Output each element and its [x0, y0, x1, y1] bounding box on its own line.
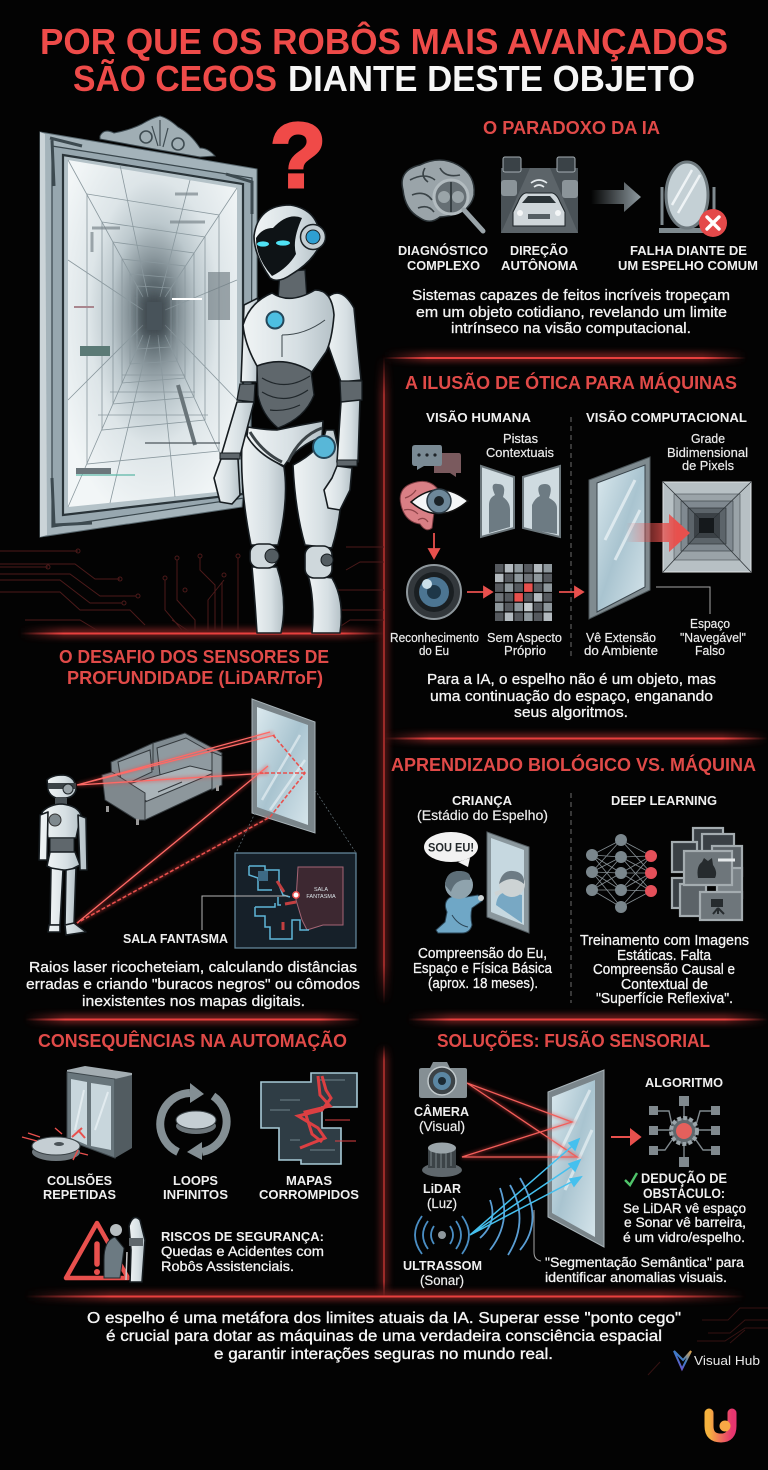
label ultrasound: ULTRASSOM: [403, 1258, 482, 1273]
callout line: [202, 896, 288, 930]
phantom room: [296, 867, 343, 930]
callout line: [656, 587, 710, 614]
blue beams: [470, 1139, 581, 1235]
labels: DIREÇÃO: [510, 243, 568, 258]
icon: tall mirror: [589, 457, 650, 619]
title: POR QUE OS ROBÔS MAIS AVANÇADOS: [40, 20, 728, 62]
text: semantic segmentation: [545, 1254, 744, 1285]
mirror crest: [100, 116, 215, 157]
text: obstacle deduction: [623, 1169, 746, 1245]
labels: pistas and grade: Grade: [691, 432, 725, 446]
heading: SOLUÇÕES: FUSÃO SENSORIAL: [437, 1030, 710, 1051]
text: obstacle deduction: Se LiDAR vê espaço: [623, 1200, 746, 1216]
robot pelvis: [247, 421, 323, 466]
phantom room label: [306, 887, 336, 900]
title: [40, 20, 728, 99]
body text: intrínseco na visão computacional.: [451, 320, 691, 337]
icon: oval mirror with X: [659, 162, 727, 237]
icon: lidar: [422, 1142, 462, 1177]
logo: Visual Hub: [674, 1351, 760, 1369]
body text machine: Contextual de: [621, 976, 708, 993]
labels: bottom row: Vê Extensão: [586, 631, 656, 645]
panel: aprendizado biológico vs máquina: [391, 754, 756, 1007]
labels: bottom row: Espaço: [690, 617, 730, 631]
column headings: CRIANÇA: [452, 793, 513, 808]
title: DIANTE DESTE OBJETO: [288, 58, 695, 99]
labels: COMPLEXO: [407, 258, 480, 273]
conclusion text: O espelho é uma metáfora dos limites atuais da IA. Superar esse "ponto cego": [87, 1310, 681, 1327]
arrow: [559, 587, 583, 597]
body text: seus algoritmos.: [514, 704, 628, 721]
body text child: [413, 945, 553, 992]
panel: o paradoxo da IA: [398, 117, 758, 337]
heading: O PARADOXO DA IA: [483, 117, 660, 138]
robot abdomen: [257, 360, 314, 428]
icon: mirror: [548, 1070, 604, 1247]
label: SALA FANTASMA: [123, 931, 229, 946]
body text: erradas e criando "buracos negros" ou cômodos: [26, 976, 360, 993]
circuit traces bottom right: [648, 1308, 768, 1375]
body text child: Compreensão do Eu,: [418, 945, 547, 962]
icon: pixel tunnel: [663, 482, 751, 572]
labels: bottom row: Falso: [695, 644, 725, 658]
labels: COLISÕES: [47, 1173, 112, 1188]
body text machine: Treinamento com Imagens: [580, 932, 749, 949]
icon: humanoid robot: [214, 205, 362, 633]
labels: bottom row: Reconhecimento: [390, 631, 479, 645]
body text child: (aprox. 18 meses).: [428, 975, 538, 992]
labels: pistas and grade: de Pixels: [682, 459, 734, 473]
panel: hero illustration: [0, 105, 384, 633]
body text: [427, 671, 716, 721]
labels: [43, 1173, 359, 1202]
label lidar: [423, 1181, 462, 1211]
icon: baby: [436, 871, 484, 933]
icon: wardrobe and robot vacuum: [22, 1066, 132, 1161]
labels: bottom row: [390, 617, 746, 658]
labels: CORROMPIDOS: [259, 1187, 359, 1202]
icon: robot small: [39, 775, 87, 935]
icon: algorithm gear: [649, 1096, 720, 1167]
icon: speech bubbles: [412, 445, 461, 477]
icon: two mirrors with silhouettes: [481, 466, 560, 537]
text: obstacle deduction: DEDUÇÃO DE: [641, 1169, 727, 1186]
callout line: [534, 1210, 541, 1261]
icon: brain and eye: [400, 481, 468, 530]
labels: REPETIDAS: [43, 1187, 116, 1202]
column headings: (Estádio do Espelho): [417, 807, 548, 823]
robot head: [254, 205, 320, 280]
labels: bottom row: do Ambiente: [584, 644, 658, 658]
icon: check mark: [625, 1173, 637, 1185]
lasers: [77, 732, 305, 923]
heading: O DESAFIO DOS SENSORES DE: [59, 646, 329, 667]
robot legs: [242, 430, 286, 545]
column headings: DEEP LEARNING: [611, 793, 717, 808]
mirror glass tunnel: [68, 160, 237, 507]
robot chest: [243, 290, 334, 372]
text: safety risks: Robôs Assistenciais.: [161, 1258, 294, 1274]
labels: pistas and grade: Contextuais: [486, 446, 554, 460]
section dividers: [20, 352, 768, 1301]
icon: sonar arcs: [480, 1178, 532, 1255]
arrow: [591, 182, 641, 212]
label camera: CÂMERA: [414, 1104, 470, 1119]
robot arms: [325, 293, 361, 382]
body text: [412, 287, 730, 337]
label algorithm: ALGORITMO: [645, 1075, 723, 1090]
labels: bottom row: "Navegável": [680, 631, 746, 645]
pixel grid: [495, 564, 552, 621]
robot neck: [278, 270, 307, 300]
heading: CONSEQUÊNCIAS NA AUTOMAÇÃO: [38, 1030, 347, 1051]
arrow: red gradient: [626, 514, 690, 552]
text: obstacle deduction: é um vidro/espelho.: [623, 1229, 745, 1245]
logo: bottom U mark: [709, 1413, 732, 1438]
labels: MAPAS: [286, 1173, 332, 1188]
icon: question mark: ?: [270, 105, 326, 207]
speech bubble: [424, 832, 478, 867]
body text: Raios laser ricocheteiam, calculando distâncias: [29, 959, 357, 976]
label ultrasound: [403, 1258, 482, 1288]
labels: DIAGNÓSTICO: [398, 243, 488, 258]
icon: ornate mirror: [40, 116, 257, 537]
labels: bottom row: Sem Aspecto: [487, 631, 562, 645]
heading: APRENDIZADO BIOLÓGICO VS. MÁQUINA: [391, 754, 756, 775]
speech bubble: SOU EU!: [428, 842, 474, 854]
label lidar: (Luz): [427, 1196, 457, 1211]
body text: em um objeto cotidiano, revelando um limite: [416, 304, 727, 321]
body text child: Espaço e Física Básica: [413, 960, 553, 977]
body text machine: Compreensão Causal e: [593, 961, 735, 978]
labels: pistas and grade: Pistas: [503, 432, 538, 446]
circuit traces: [0, 547, 384, 632]
icon: neural network: [586, 834, 657, 913]
floor map inset: [235, 853, 356, 948]
icon: camera: [419, 1062, 467, 1098]
arrow: [467, 587, 492, 597]
icon: autonomous car: [501, 157, 578, 233]
label ultrasound: (Sonar): [420, 1273, 464, 1288]
labels: INFINITOS: [163, 1187, 228, 1202]
body text: Sistemas capazes de feitos incríveis tropeçam: [412, 287, 730, 304]
text: semantic segmentation: identificar anomalias visuais.: [545, 1269, 727, 1285]
text: obstacle deduction: e Sonar vê barreira,: [624, 1214, 746, 1230]
labels: LOOPS: [173, 1173, 218, 1188]
icon: image stack: [672, 828, 742, 920]
label lidar: LiDAR: [423, 1181, 462, 1196]
logo: Visual Hub: Visual Hub: [694, 1354, 760, 1368]
panel: a ilusão de ótica: [390, 372, 751, 721]
icon: warning with elder and robot: [66, 1218, 145, 1282]
icon: wall mirror: [252, 699, 315, 833]
heading: [59, 646, 329, 688]
icon: corrupted map: [261, 1073, 357, 1164]
body text: Para a IA, o espelho não é um objeto, mas: [427, 671, 716, 688]
red beams: [462, 1083, 577, 1157]
body text: inexistentes nos mapas digitais.: [82, 993, 305, 1010]
labels: UM ESPELHO COMUM: [618, 258, 758, 273]
icon: sofa: [102, 733, 222, 825]
body text: [26, 959, 360, 1010]
body text machine: Estáticas. Falta: [617, 947, 712, 964]
phantom room label: FANTASMA: [306, 894, 336, 900]
text: semantic segmentation: "Segmentação Semântica" para: [545, 1254, 744, 1270]
labels: pistas and grade: Bidimensional: [667, 446, 748, 460]
conclusion text: e garantir interações seguras no mundo real.: [214, 1346, 553, 1363]
labels: pistas and grade: [486, 432, 748, 473]
body text: uma continuação do espaço, enganando: [430, 688, 713, 705]
label camera: [414, 1104, 470, 1134]
body text machine: "Superfície Reflexiva".: [596, 990, 733, 1007]
mirror frame corners: [50, 138, 252, 525]
icon: mirror with reflection: [487, 832, 529, 933]
arrow: [611, 1130, 640, 1144]
title: SÃO CEGOS: [73, 57, 277, 99]
label camera: (Visual): [419, 1119, 465, 1134]
column headings: VISÃO COMPUTACIONAL: [586, 410, 747, 425]
conclusion text: [87, 1310, 681, 1363]
labels: AUTÔNOMA: [501, 258, 579, 273]
icon: ultrasound: [415, 1216, 469, 1254]
icon: camera lens: [407, 565, 461, 619]
text: obstacle deduction: OBSTÁCULO:: [643, 1185, 725, 1201]
heading: A ILUSÃO DE ÓTICA PARA MÁQUINAS: [405, 372, 737, 393]
column headings: [417, 793, 717, 823]
conclusion text: é crucial para dotar as máquinas de uma verdadeira consciência espacial: [106, 1328, 662, 1345]
phantom room label: SALA: [314, 887, 328, 893]
panel: soluções fusão sensorial: [403, 1030, 746, 1288]
text: safety risks: [161, 1229, 324, 1274]
body text machine: [580, 932, 749, 1007]
labels: FALHA DIANTE DE: [630, 243, 747, 258]
labels: bottom row: Próprio: [504, 644, 546, 658]
column headings: VISÃO HUMANA: [426, 410, 532, 425]
icon: brain under magnifier: [402, 160, 483, 231]
panel: sensores de profundidade: [26, 646, 360, 1010]
labels: bottom row: do Eu: [419, 644, 449, 658]
text: safety risks: Quedas e Acidentes com: [161, 1243, 324, 1259]
text: safety risks: RISCOS DE SEGURANÇA:: [161, 1229, 324, 1244]
arrow: [429, 533, 439, 558]
icon: loop with vacuum: [160, 1083, 227, 1160]
labels: [398, 243, 758, 273]
dotted guides: [236, 790, 356, 853]
heading: PROFUNDIDADE (LiDAR/ToF): [67, 667, 323, 688]
column headings: [426, 410, 747, 425]
panel: consequências na automação: [22, 1030, 359, 1282]
